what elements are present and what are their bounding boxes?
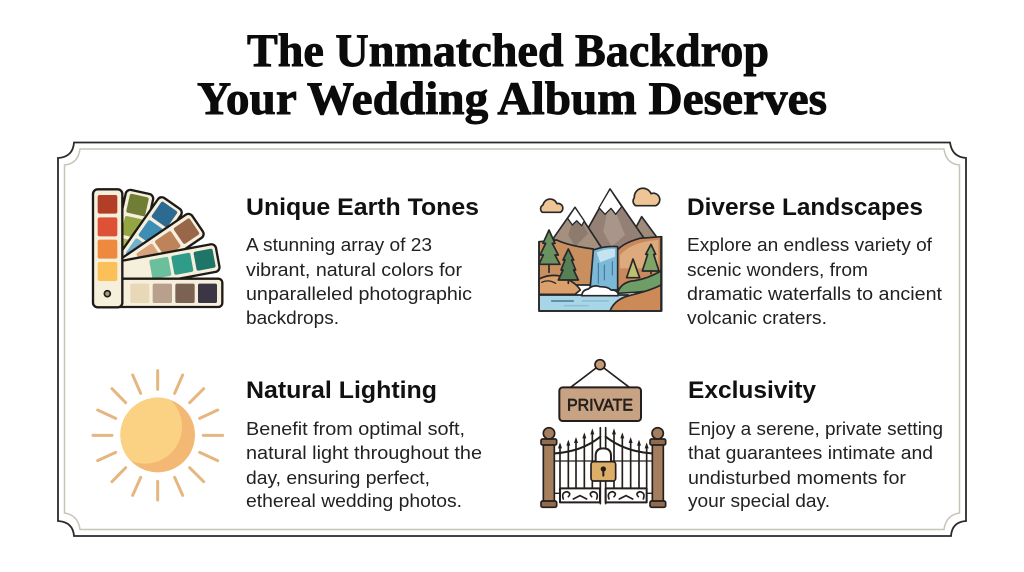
icon: sun: [93, 371, 223, 500]
heading: Diverse Landscapes: [687, 194, 923, 221]
text block: [246, 419, 482, 511]
text block: natural light throughout the: [246, 443, 482, 463]
text block: Enjoy a serene, private setting: [688, 419, 943, 439]
icon: colour swatch fan: [93, 189, 222, 307]
text block: Benefit from optimal soft,: [246, 419, 465, 439]
title: Your Wedding Album Deserves: [197, 73, 827, 125]
text block: volcanic craters.: [687, 308, 827, 328]
heading: Unique Earth Tones: [246, 194, 479, 221]
icon: mountains and waterfall: [539, 188, 662, 311]
ornate frame: [58, 142, 966, 536]
text block: unparalleled photographic: [246, 284, 472, 304]
heading: Natural Lighting: [246, 377, 437, 404]
text block: [688, 419, 943, 511]
icon: iron gate: [541, 428, 666, 507]
icon: private gate with padlock: [541, 360, 666, 507]
text block: ethereal wedding photos.: [246, 491, 462, 511]
panel: diverse landscapes: [539, 188, 942, 328]
text block: undisturbed moments for: [688, 468, 906, 488]
text block: your special day.: [688, 491, 830, 511]
text block: day, ensuring perfect,: [246, 468, 430, 488]
panel: natural lighting: [93, 371, 482, 511]
panel: exclusivity: [541, 360, 943, 511]
text block: A stunning array of 23: [246, 235, 432, 255]
text block: Explore an endless variety of: [687, 235, 933, 255]
icon: private sign: [559, 360, 641, 421]
text block: that guarantees intimate and: [688, 443, 933, 463]
panel: unique earth tones: [93, 189, 479, 328]
text block: [246, 235, 472, 328]
title: [197, 25, 827, 125]
title: The Unmatched Backdrop: [247, 25, 769, 77]
text block: scenic wonders, from: [687, 260, 868, 280]
text block: backdrops.: [246, 308, 339, 328]
text block: vibrant, natural colors for: [246, 260, 462, 280]
text block: [687, 235, 942, 328]
heading: Exclusivity: [688, 377, 817, 404]
icon: private sign: PRIVATE: [567, 395, 633, 414]
text block: dramatic waterfalls to ancient: [687, 284, 942, 304]
